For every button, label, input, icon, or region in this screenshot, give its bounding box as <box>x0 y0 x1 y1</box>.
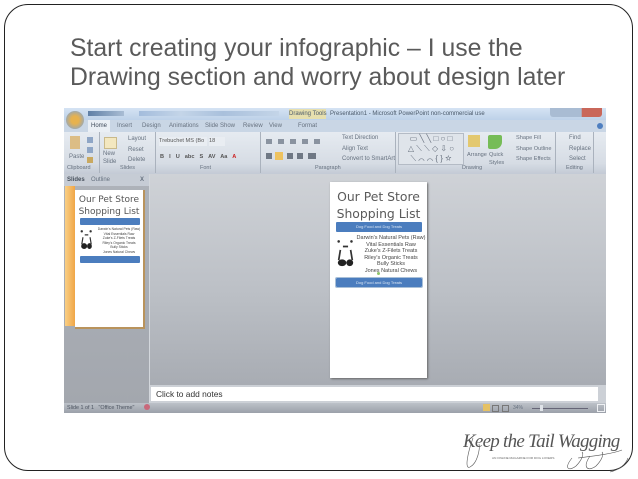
shapes gallery: ▭ ╲ ╲ □ ○ □ <box>410 134 452 143</box>
paragraph group <box>261 132 396 173</box>
quick access toolbar <box>88 111 124 116</box>
thumbnail heading: Shopping List <box>79 207 139 217</box>
slide thumbnail <box>75 190 145 329</box>
thumbnail dog <box>80 230 92 249</box>
ribbon tabs: Review <box>243 123 263 129</box>
notes text <box>151 387 598 401</box>
shapes gallery <box>398 133 464 165</box>
editing group: Editing <box>566 165 583 171</box>
thumbnail list: Vital Essentials Raw <box>104 232 134 236</box>
editing commands: Find <box>569 135 581 141</box>
product list: Jones Natural Chews <box>365 268 417 274</box>
arrange icon <box>468 135 480 147</box>
thumbnail heading: Our Pet Store <box>79 195 139 205</box>
font selector: Trebuchet MS (Bo <box>159 138 204 144</box>
ribbon tabs: Animations <box>169 123 199 129</box>
status text: Slide 1 of 1 "Office Theme" <box>67 405 134 411</box>
drawing group: Arrange <box>467 152 487 158</box>
shapes gallery: ⟍ ⌒ ⌒ { } ☆ <box>410 154 452 163</box>
view buttons <box>483 404 490 411</box>
status bar <box>64 403 606 413</box>
text commands: Text Direction <box>342 135 378 141</box>
shapes gallery: △ ⟍ ⟍ ◇ ⇩ ○ <box>408 144 454 153</box>
editing commands <box>569 134 591 162</box>
ribbon tabs: Design <box>142 123 161 129</box>
quick styles icon <box>488 135 502 149</box>
paragraph group: Paragraph <box>315 165 341 171</box>
font group: 18 <box>209 138 215 144</box>
thumbnail list: Darwin's Natural Pets (Raw) <box>98 227 140 231</box>
help icon <box>597 123 603 129</box>
drawing group: Quick <box>489 152 503 158</box>
product list: Bully Sticks <box>377 261 405 267</box>
clipboard group: Clipboard <box>67 165 91 171</box>
slide heading: Our Pet Store <box>337 189 420 204</box>
slide editing area <box>150 174 606 385</box>
slides group: Delete <box>128 157 145 163</box>
slide heading <box>337 189 420 220</box>
logo: Keep the Tail Wagging <box>463 431 628 472</box>
notes text: Click to add notes <box>156 389 223 399</box>
drawing group: Styles <box>489 160 504 166</box>
office button <box>66 111 84 129</box>
text commands: Align Text <box>342 146 368 152</box>
logo flourishes <box>466 438 628 472</box>
spell check icon <box>144 404 150 410</box>
product list: Riley's Organic Treats <box>364 255 418 261</box>
font group <box>156 132 261 173</box>
selected bottom banner <box>336 278 422 287</box>
top banner <box>336 222 422 232</box>
product list: Vital Essentials Raw <box>366 242 416 248</box>
selected bottom banner: Dog Food and Dog Treats <box>356 280 402 285</box>
slides group: Slide <box>103 159 116 165</box>
panel tabs: Outline <box>91 177 110 183</box>
editing commands: Replace <box>569 146 591 152</box>
product list: Zuke's Z-Filets Treats <box>365 248 417 254</box>
top banner: Dog Food and Dog Treats <box>356 224 402 229</box>
tab labels <box>88 120 110 132</box>
drawing tools label <box>289 109 326 119</box>
slides group: Reset <box>128 146 144 152</box>
thumbnail list <box>98 227 140 254</box>
ribbon tabs: View <box>269 123 282 129</box>
product list <box>356 235 426 274</box>
zoom slider <box>532 408 588 409</box>
thumbnail list: Jones Natural Chews <box>103 250 135 254</box>
thumbnail list: Bully Sticks <box>110 245 128 249</box>
title bar <box>64 108 606 120</box>
thumbnail list: Zuke's Z-Filets Treats <box>103 236 135 240</box>
editing commands: Select <box>569 156 586 162</box>
slides group: New <box>103 151 115 157</box>
left panel <box>64 174 150 403</box>
thumbnail heading <box>79 195 140 217</box>
ribbon tabs: Format <box>298 123 317 129</box>
alignment buttons <box>266 153 272 159</box>
slides group <box>100 132 156 173</box>
window controls <box>550 108 602 117</box>
notes pane <box>150 385 606 403</box>
title <box>70 35 565 91</box>
PowerPoint screenshot <box>64 108 606 413</box>
product list: Darwin's Natural Pets (Raw) <box>357 235 425 241</box>
ribbon <box>64 132 606 174</box>
drawing group: Shape Fill <box>516 135 541 141</box>
drawing group: Drawing <box>462 165 482 171</box>
panel tabs <box>64 174 149 186</box>
title: Drawing section and worry about design later <box>70 64 565 91</box>
title tabs <box>139 111 279 116</box>
ribbon tabs <box>64 120 606 132</box>
new slide icon <box>104 137 117 149</box>
slide page <box>330 182 427 378</box>
zoom level: 34% <box>513 405 523 411</box>
clipboard group: Paste <box>69 154 84 160</box>
slide heading: Shopping List <box>337 206 420 220</box>
list buttons <box>266 139 324 144</box>
ribbon tabs: Insert <box>117 123 132 129</box>
fit button <box>597 404 605 412</box>
text commands: Convert to SmartArt <box>342 156 395 162</box>
drawing group: Shape Effects <box>516 156 551 162</box>
window title: Presentation1 - Microsoft PowerPoint non-commercial use <box>330 111 485 117</box>
logo wordmark: Keep the Tail Wagging <box>463 431 620 452</box>
panel tabs: X <box>140 177 144 183</box>
slides group: Layout <box>128 136 146 142</box>
clipboard group <box>65 132 100 173</box>
dog illustration <box>337 240 354 266</box>
drawing tools label: Drawing Tools <box>289 111 327 117</box>
thumbnail banner 2 <box>80 256 140 263</box>
title: Start creating your infographic – I use the <box>70 35 523 62</box>
drawing group: Shape Outline <box>516 146 551 152</box>
font style buttons: B I U abc S AV Aa A <box>160 154 236 160</box>
panel tabs: Slides <box>67 177 85 183</box>
text commands <box>342 134 395 162</box>
tab labels: Home <box>91 123 107 129</box>
thumbnail list: Riley's Organic Treats <box>102 241 136 245</box>
drawing group <box>396 132 556 173</box>
slides group: Slides <box>120 165 135 171</box>
thumbnail banner <box>80 218 140 225</box>
editing group <box>556 132 594 173</box>
paste icon <box>70 136 80 149</box>
ribbon tabs: Slide Show <box>205 123 235 129</box>
font group: Font <box>200 165 211 171</box>
rotation handle <box>377 272 380 275</box>
font selector <box>159 137 207 146</box>
clipboard small icons <box>87 137 93 143</box>
logo tagline: AN ONLINE MAGAZINE FOR DOG LOVERS <box>492 456 554 460</box>
orange selection strip <box>65 186 75 326</box>
